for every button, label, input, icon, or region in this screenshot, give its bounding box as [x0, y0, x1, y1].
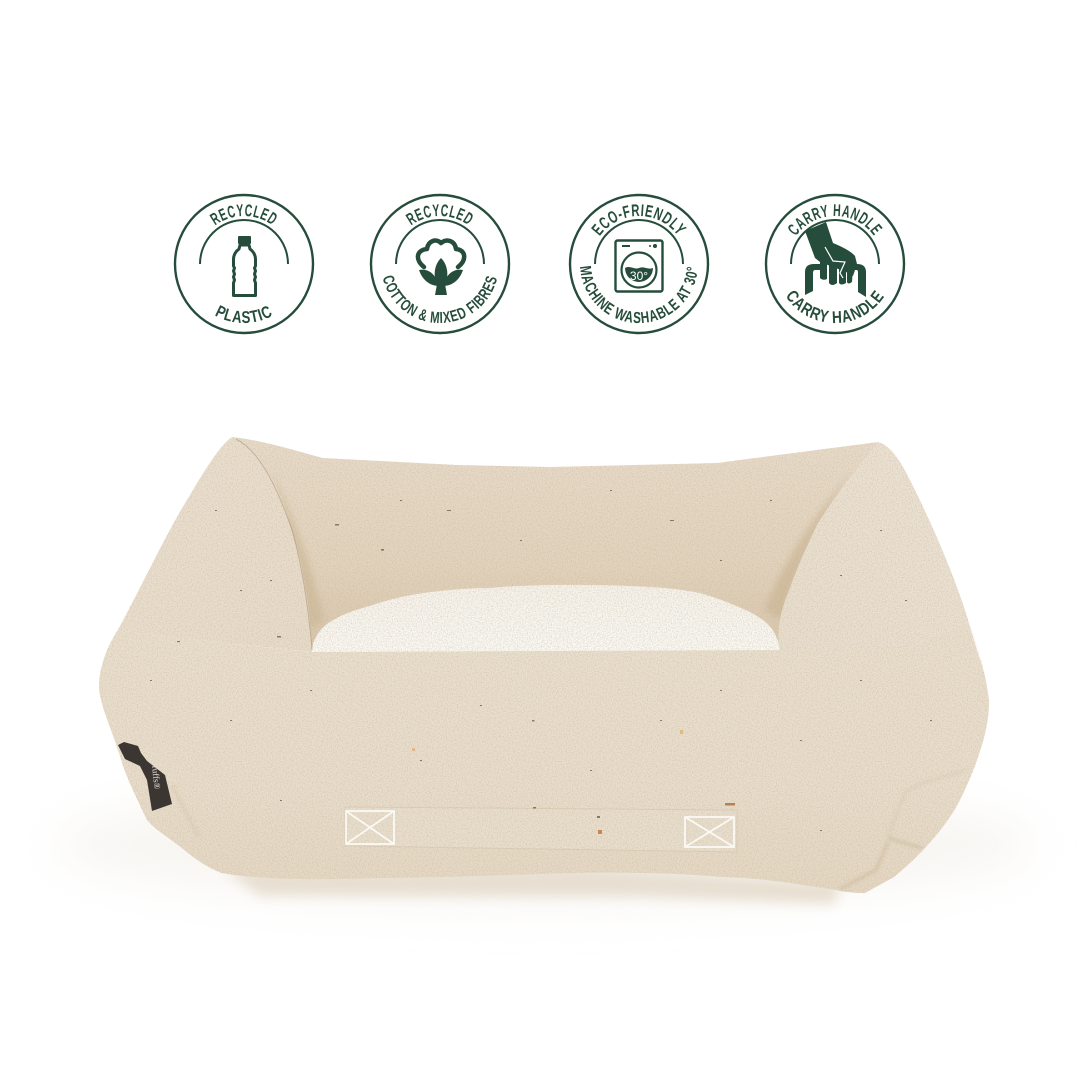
brand label tag [118, 742, 172, 811]
left side wall [118, 437, 312, 652]
handle stitching [346, 811, 734, 847]
badge: recycled plastic: RECYCLED [209, 204, 277, 226]
cushion [312, 585, 780, 652]
fabric specks [150, 490, 932, 834]
inner wall shading [270, 470, 855, 630]
back wall [232, 437, 878, 650]
icon: washing machine: 30° [630, 269, 648, 283]
infographic canvas [92, 194, 998, 910]
badge: eco-friendly machine washable [568, 194, 710, 334]
ground shadow [55, 785, 1035, 905]
icon: cotton plant [418, 241, 464, 295]
carry handle strap [345, 807, 737, 852]
left stitch box [346, 811, 394, 844]
badge: recycled plastic [174, 194, 314, 334]
right stitch box [685, 817, 734, 847]
cushion fleece texture [312, 585, 780, 652]
corner folds [172, 770, 966, 889]
badge: carry handle [764, 194, 906, 334]
badge: recycled cotton and mixed fibres [370, 194, 510, 334]
badge: carry handle: CARRY HANDLE [788, 204, 883, 236]
icon: hand gripping handle [805, 222, 866, 297]
left seam [236, 439, 312, 650]
badge: eco-friendly machine washable: MACHINE WASHABLE AT 30° [580, 266, 697, 324]
badge: carry handle: CARRY HANDLE [787, 290, 884, 324]
badge: eco-friendly machine washable: ECO-FRIENDLY [591, 204, 687, 236]
badge: recycled cotton and mixed fibres: RECYCLED [405, 204, 473, 226]
front wall [99, 625, 989, 893]
right side wall [778, 442, 980, 660]
brand label tag: ruffs® [150, 765, 162, 790]
pet bed product illustration [55, 435, 1035, 905]
badge: recycled cotton and mixed fibres: COTTON & MIXED FIBRES [383, 276, 497, 324]
badge: recycled plastic: PLASTIC [215, 305, 272, 324]
fabric texture [95, 435, 995, 895]
icon: plastic bottle [234, 236, 256, 296]
